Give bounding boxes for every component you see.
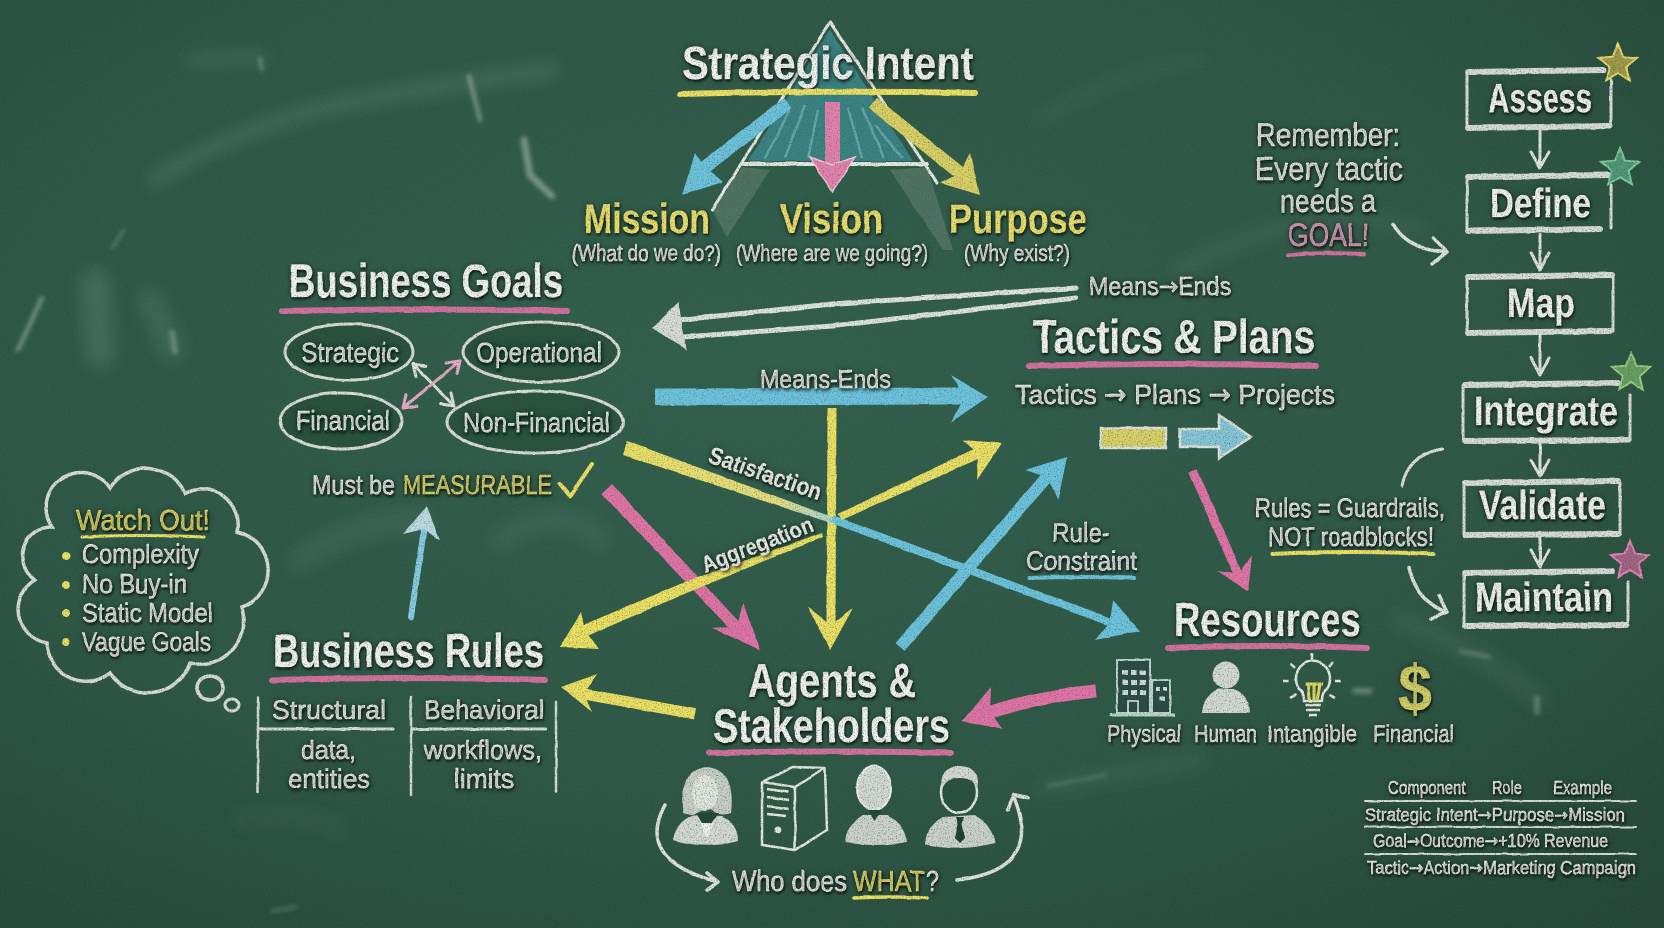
- arrow: means to ends, back to business goals: [652, 271, 1231, 350]
- table rows: Goal→Outcome→+10% Revenue: [1373, 831, 1608, 852]
- vision: (Where are we going?): [736, 240, 928, 266]
- central arrows: [403, 408, 1252, 729]
- resource labels: Physical: [1107, 721, 1181, 748]
- step: assess: Assess: [1488, 75, 1592, 121]
- heading: [713, 654, 950, 752]
- arrow: [1531, 537, 1549, 567]
- callout: remember: [1255, 117, 1447, 264]
- arrow: [1531, 444, 1549, 476]
- star: green: [1601, 148, 1639, 184]
- goal type: financial: Financial: [296, 405, 390, 436]
- callout: watch out cloud: No Buy-in: [82, 569, 187, 599]
- arrow: means to ends, back to business goals: Means→Ends: [1089, 271, 1231, 302]
- heading underline: [272, 678, 545, 680]
- arrow: yellow and blue satisfaction line: [623, 441, 1140, 640]
- table rows: [1365, 805, 1636, 879]
- arrow: right curve: [957, 795, 1028, 880]
- heading: Business Rules: [273, 624, 544, 677]
- caption: who does what: WHAT: [853, 866, 925, 898]
- icon: dollar: $: [1398, 651, 1432, 725]
- icon: man: [845, 766, 907, 845]
- callout: remember: Every tactic: [1255, 151, 1403, 187]
- arrow: yellow down to agents: [808, 408, 853, 650]
- rules table: [258, 695, 556, 795]
- measurable note: MEASURABLE: [403, 470, 552, 500]
- step: define: Define: [1490, 180, 1591, 226]
- yellow bar: [1101, 428, 1166, 448]
- arrow: pink tactics to resources: [1193, 471, 1252, 591]
- resource labels: [1107, 721, 1454, 748]
- resource labels: Financial: [1373, 721, 1454, 748]
- purpose: Purpose: [949, 195, 1087, 242]
- star: pink: [1611, 541, 1649, 577]
- callout: remember: needs a: [1280, 183, 1376, 219]
- mission: Mission: [584, 195, 710, 242]
- arrow: yellow aggregation double-headed: [560, 440, 1002, 649]
- goal type: non-financial: Non-Financial: [463, 407, 610, 438]
- callout: watch out cloud: Complexity: [82, 539, 199, 569]
- crossing arrows between goal types: [403, 361, 460, 408]
- heading: Resources: [1174, 593, 1361, 646]
- arrow: left curve: [657, 805, 718, 890]
- arrow: blue agents to tactics: [900, 457, 1067, 647]
- callout: rules guardrails: [1255, 449, 1447, 619]
- rules table: limits: [454, 764, 514, 794]
- step: assess: [1467, 70, 1611, 128]
- panel: tactics and plans: [1015, 310, 1335, 458]
- star: yellow: [1599, 44, 1637, 80]
- measurable note: [312, 464, 592, 500]
- step: maintain: Maintain: [1475, 574, 1613, 620]
- rules table: workflows,: [423, 735, 542, 765]
- step: integrate: [1463, 383, 1630, 441]
- heading underline: [282, 310, 567, 311]
- arrow: blue rules to goals: [403, 506, 440, 617]
- star: light green: [1612, 353, 1650, 389]
- step: map: [1467, 275, 1613, 333]
- table header: Role: [1492, 778, 1522, 798]
- icon: woman: [673, 767, 738, 845]
- blue arrow: [1180, 415, 1251, 458]
- heading: Tactics & Plans: [1033, 310, 1315, 363]
- vision: [736, 195, 928, 266]
- purpose: (Why exist?): [964, 240, 1070, 266]
- table rows: Strategic Intent→Purpose→Mission: [1365, 805, 1625, 826]
- triangle with teal hatching: [712, 22, 953, 250]
- tactic chain: Tactics → Plans → Projects: [1015, 378, 1335, 411]
- icon: person: [1202, 662, 1250, 713]
- arrow: to purpose: [873, 103, 980, 195]
- arrow: means-ends to tactics: [655, 364, 988, 422]
- callout: watch out cloud: [18, 468, 268, 711]
- summary table: [1365, 778, 1636, 879]
- panel: agents and stakeholders: [657, 654, 1028, 898]
- rules table: Structural: [272, 695, 386, 725]
- arrow: to mission: [682, 103, 788, 195]
- goal type: financial: [280, 393, 402, 449]
- rules table: data,: [301, 735, 356, 765]
- panel: strategic intent: [572, 22, 1087, 266]
- goal type: operational: [463, 322, 619, 382]
- title underline: [680, 92, 975, 94]
- step: validate: Validate: [1479, 482, 1606, 528]
- table header: Component: [1388, 778, 1466, 798]
- arrow: yellow agents to rules: [561, 674, 695, 714]
- callout: watch out cloud: Vague Goals: [82, 627, 211, 657]
- table header: Example: [1553, 778, 1612, 798]
- heading: Stakeholders: [713, 699, 950, 752]
- arrow: pink resources to agents: [962, 687, 1096, 729]
- step: integrate: Integrate: [1474, 388, 1618, 434]
- rules table: entities: [288, 764, 370, 794]
- table rows: Tactic→Action→Marketing Campaign: [1367, 858, 1636, 879]
- label: rule-constraint: Rule-: [1052, 518, 1110, 548]
- icon: lightbulb: [1283, 653, 1341, 715]
- caption: who does what: ?: [926, 866, 939, 898]
- panel: resources: [1107, 593, 1454, 748]
- label: satisfaction: Satisfaction: [705, 442, 825, 506]
- rules table: Behavioral: [424, 695, 544, 725]
- measurable note: Must be: [312, 470, 395, 500]
- purpose: [949, 195, 1087, 266]
- step: map: Map: [1507, 280, 1575, 326]
- heading: Agents &: [748, 654, 916, 707]
- icon: man in suit: [925, 766, 995, 848]
- goal type: strategic: Strategic: [301, 337, 399, 368]
- heading underline: [1168, 646, 1367, 648]
- callout: rules guardrails: NOT roadblocks!: [1268, 522, 1434, 552]
- title: Strategic Intent: [682, 37, 974, 89]
- callout: remember: GOAL!: [1288, 217, 1369, 253]
- label: rule-constraint: [1026, 518, 1137, 578]
- process steps: [1463, 44, 1650, 626]
- heading: Business Goals: [289, 254, 563, 307]
- icon: computer tower: [762, 767, 827, 850]
- step: define: [1467, 175, 1611, 231]
- goal type: operational: Operational: [476, 337, 602, 368]
- table rules: [1365, 801, 1636, 854]
- caption: who does what: Who does: [732, 866, 847, 898]
- goal type: strategic: [285, 324, 413, 380]
- table header: [1388, 778, 1612, 798]
- panel: business rules: [258, 624, 556, 795]
- resource labels: Human: [1194, 721, 1257, 748]
- arrow: [1531, 235, 1549, 270]
- arrow: to vision: [810, 102, 855, 192]
- goal type: non-financial: [447, 391, 623, 453]
- callout: rules guardrails: Rules = Guardrails,: [1255, 493, 1445, 523]
- icon: building: [1110, 660, 1175, 715]
- vision: Vision: [780, 195, 883, 242]
- resource labels: Intangible: [1267, 721, 1357, 748]
- arrow: [1531, 131, 1549, 168]
- label: aggregation: Aggregation: [697, 511, 817, 578]
- heading underline: [1029, 364, 1316, 366]
- label: rule-constraint: Constraint: [1026, 546, 1137, 576]
- arrow: pink goals to agents: [602, 484, 760, 650]
- caption: who does what: [732, 866, 939, 898]
- callout: watch out cloud: Watch Out!: [76, 505, 210, 537]
- mission: [572, 195, 721, 266]
- arrow: [1531, 336, 1549, 375]
- arrow: means-ends to tactics: Means-Ends: [760, 364, 891, 394]
- heading underline: [709, 752, 951, 753]
- panel: business goals: [280, 254, 623, 500]
- callout: watch out cloud: Static Model: [82, 598, 213, 628]
- mission: (What do we do?): [572, 240, 721, 266]
- callout: remember: Remember:: [1256, 117, 1400, 153]
